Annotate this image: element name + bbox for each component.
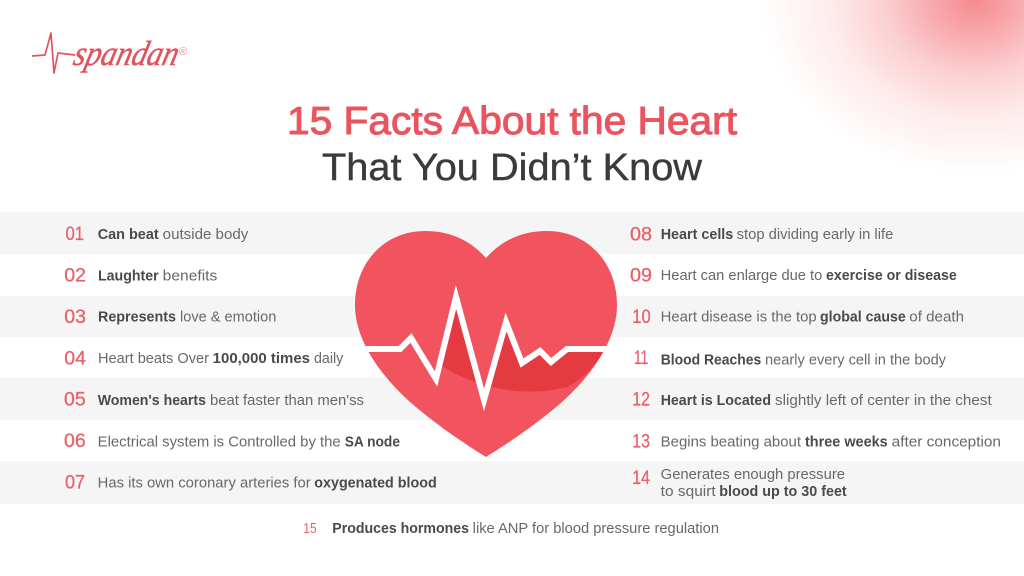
fact 04: daily xyxy=(314,351,344,367)
fact 10: of death xyxy=(909,310,964,326)
fact 11: 11 xyxy=(634,347,648,369)
fact 02: 02 xyxy=(64,264,86,286)
fact 10 xyxy=(632,306,964,328)
fact 13 xyxy=(632,431,1001,453)
fact 03: love & emotion xyxy=(180,310,276,326)
logo: spandan: spandan xyxy=(70,33,184,73)
fact 12: 12 xyxy=(632,389,650,411)
corner glow xyxy=(744,0,1024,178)
fact 09 xyxy=(630,265,957,287)
fact 03 xyxy=(64,306,276,328)
fact 05: Women's hearts xyxy=(98,393,206,409)
fact 10: global cause xyxy=(820,310,906,326)
fact 01: outside body xyxy=(163,227,249,243)
fact 11 xyxy=(634,347,947,369)
fact 04: Heart beats Over xyxy=(98,351,209,367)
fact 06: Electrical system is Controlled by the xyxy=(98,435,341,451)
fact 03: 03 xyxy=(64,306,86,328)
logo: spandan xyxy=(32,33,187,73)
fact 13: 13 xyxy=(632,431,650,453)
fact 14: 14 xyxy=(632,467,650,489)
fact 14: to squirt xyxy=(661,484,716,500)
fact 12: slightly left of center in the chest xyxy=(775,393,992,409)
fact 09: exercise or disease xyxy=(826,268,957,284)
fact 01: Can beat xyxy=(98,227,159,243)
fact 14: blood up to 30 feet xyxy=(719,484,847,500)
fact 15 xyxy=(303,521,719,537)
fact 05: beat faster than men'ss xyxy=(210,393,364,409)
fact 01 xyxy=(66,223,249,245)
fact 12 xyxy=(632,389,992,411)
fact 08: Heart cells xyxy=(661,227,733,243)
fact 08 xyxy=(630,224,893,246)
fact 06 xyxy=(64,430,400,452)
fact 05 xyxy=(64,389,364,411)
icon: heart with ECG line xyxy=(355,231,617,457)
fact 04: 04 xyxy=(64,347,86,369)
fact 02: Laughter xyxy=(98,268,159,284)
title: 15 Facts About the Heart xyxy=(287,100,737,143)
fact 06: SA node xyxy=(345,435,400,451)
fact 12: Heart is Located xyxy=(661,393,771,409)
fact 11: nearly every cell in the body xyxy=(765,352,947,368)
fact 13: after conception xyxy=(892,435,1001,451)
fact 04: 100,000 times xyxy=(213,351,310,367)
fact 03: Represents xyxy=(98,310,176,326)
fact 13: three weeks xyxy=(805,435,888,451)
fact 08: 08 xyxy=(630,224,652,246)
fact 10: Heart disease is the top xyxy=(661,310,817,326)
row bands xyxy=(0,212,1024,504)
fact 06: 06 xyxy=(64,430,86,452)
fact 01: 01 xyxy=(66,223,84,245)
fact 07: Has its own coronary arteries for xyxy=(98,476,311,492)
fact 15: Produces hormones xyxy=(332,521,469,537)
fact 07 xyxy=(65,472,437,494)
fact 08: stop dividing early in life xyxy=(737,227,893,243)
title xyxy=(287,100,737,189)
fact 14 xyxy=(632,467,847,500)
logo: spandan: ® xyxy=(179,46,187,58)
fact 02: benefits xyxy=(163,268,217,284)
fact 15: 15 xyxy=(303,521,317,537)
title: That You Didn’t Know xyxy=(322,147,703,189)
fact 10: 10 xyxy=(632,306,651,328)
fact 15: like ANP for blood pressure regulation xyxy=(473,521,719,537)
fact 11: Blood Reaches xyxy=(661,352,761,368)
fact 13: Begins beating about xyxy=(661,435,801,451)
fact 04 xyxy=(64,347,344,369)
fact 14: Generates enough pressure xyxy=(661,467,845,483)
fact 09: Heart can enlarge due to xyxy=(661,268,822,284)
fact 02 xyxy=(64,264,217,286)
fact 09: 09 xyxy=(630,265,652,287)
fact 05: 05 xyxy=(64,389,86,411)
fact 07: oxygenated blood xyxy=(314,476,437,492)
fact 07: 07 xyxy=(65,472,85,494)
